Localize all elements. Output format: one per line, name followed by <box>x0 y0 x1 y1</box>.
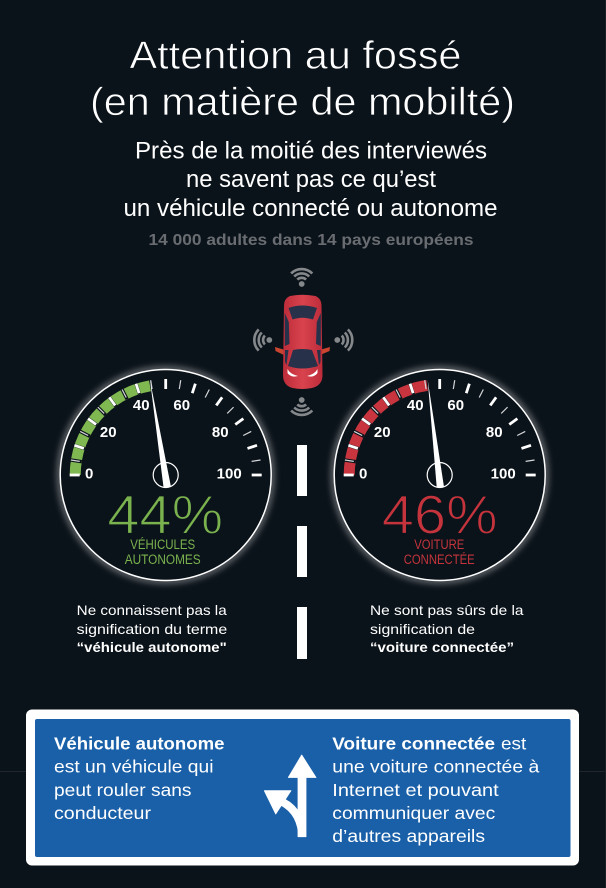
title <box>90 34 515 124</box>
note: autonomous vehicle: Ne connaissent pas la <box>77 602 227 618</box>
definition: autonomous vehicle: Véhicule autonome <box>54 734 225 754</box>
scale labels: 60 <box>447 397 464 414</box>
subtitle: Près de la moitié des interviewés <box>135 138 487 164</box>
note: autonomous vehicle: “véhicule autonome" <box>77 639 227 655</box>
progress arc <box>70 380 151 475</box>
percentage value: 44% <box>107 484 223 546</box>
icon: connected car <box>254 269 352 415</box>
definition: autonomous vehicle: conducteur <box>54 803 151 823</box>
definition: connected car <box>332 734 540 846</box>
panel: definitions road sign <box>26 710 579 866</box>
definition: autonomous vehicle: peut rouler sans <box>54 780 192 800</box>
note: connected car: signification de <box>370 621 475 637</box>
subtitle: un véhicule connecté ou autonome <box>124 195 498 222</box>
note: connected car: “voiture connectée” <box>370 639 514 655</box>
scale labels: 40 <box>407 397 424 414</box>
scale labels: 0 <box>359 466 367 482</box>
gauge: autonomous vehicles 44% <box>60 369 272 581</box>
hub and needle <box>427 380 452 488</box>
gauge caption <box>125 537 201 567</box>
tick marks <box>344 379 536 475</box>
gauge caption: VÉHICULES <box>130 537 195 552</box>
gauge caption: VOITURE <box>414 537 464 552</box>
definition: connected car: d’autres appareils <box>332 826 485 846</box>
gauge caption <box>404 537 475 567</box>
scale labels: 60 <box>173 397 190 414</box>
gauge caption: CONNECTÉE <box>404 552 475 567</box>
hub and needle <box>150 380 178 488</box>
scale labels <box>359 397 516 482</box>
subtitle: ne savent pas ce qu’est <box>186 166 436 193</box>
title: Attention au fossé <box>130 34 462 78</box>
note: connected car: Ne sont pas sûrs de la <box>370 602 524 618</box>
scale labels: 20 <box>100 424 117 441</box>
icon: signal top <box>291 269 312 287</box>
scale labels: 100 <box>217 466 242 482</box>
scale labels: 0 <box>85 466 93 482</box>
sample size note: 14 000 adultes dans 14 pays européens <box>148 232 474 249</box>
title: (en matière de mobilté) <box>90 81 515 124</box>
definition: connected car: Voiture connectée <box>332 734 495 754</box>
definition: connected car: une voiture connectée à <box>332 757 540 777</box>
definition: connected car: communiquer avec <box>332 803 496 823</box>
gauge: connected car 46% <box>334 369 546 581</box>
note: autonomous vehicle: signification du terme <box>77 621 227 637</box>
scale labels: 40 <box>133 397 150 414</box>
icon: road sign fork arrow <box>264 755 316 837</box>
icon: car body <box>275 295 330 389</box>
scale labels <box>85 397 242 482</box>
scale labels: 80 <box>212 424 229 441</box>
road dashes <box>297 445 307 659</box>
icon: signal right <box>334 329 352 351</box>
tick marks <box>70 379 262 475</box>
definition: connected car: Internet et pouvant <box>332 780 499 800</box>
percentage value: 46% <box>382 484 498 546</box>
icon: signal bottom <box>291 397 312 415</box>
definition: autonomous vehicle: est un véhicule qui <box>54 757 214 777</box>
scale labels: 20 <box>374 424 391 441</box>
gauge caption: AUTONOMES <box>125 552 201 567</box>
scale labels: 100 <box>491 466 516 482</box>
note: connected car <box>370 602 524 655</box>
scale labels: 80 <box>486 424 503 441</box>
definition: autonomous vehicle <box>54 734 225 823</box>
note: autonomous vehicle <box>77 602 227 655</box>
icon: signal left <box>254 329 272 351</box>
progress arc <box>344 380 428 475</box>
definition: connected car: est <box>501 734 526 754</box>
subtitle <box>124 138 498 222</box>
